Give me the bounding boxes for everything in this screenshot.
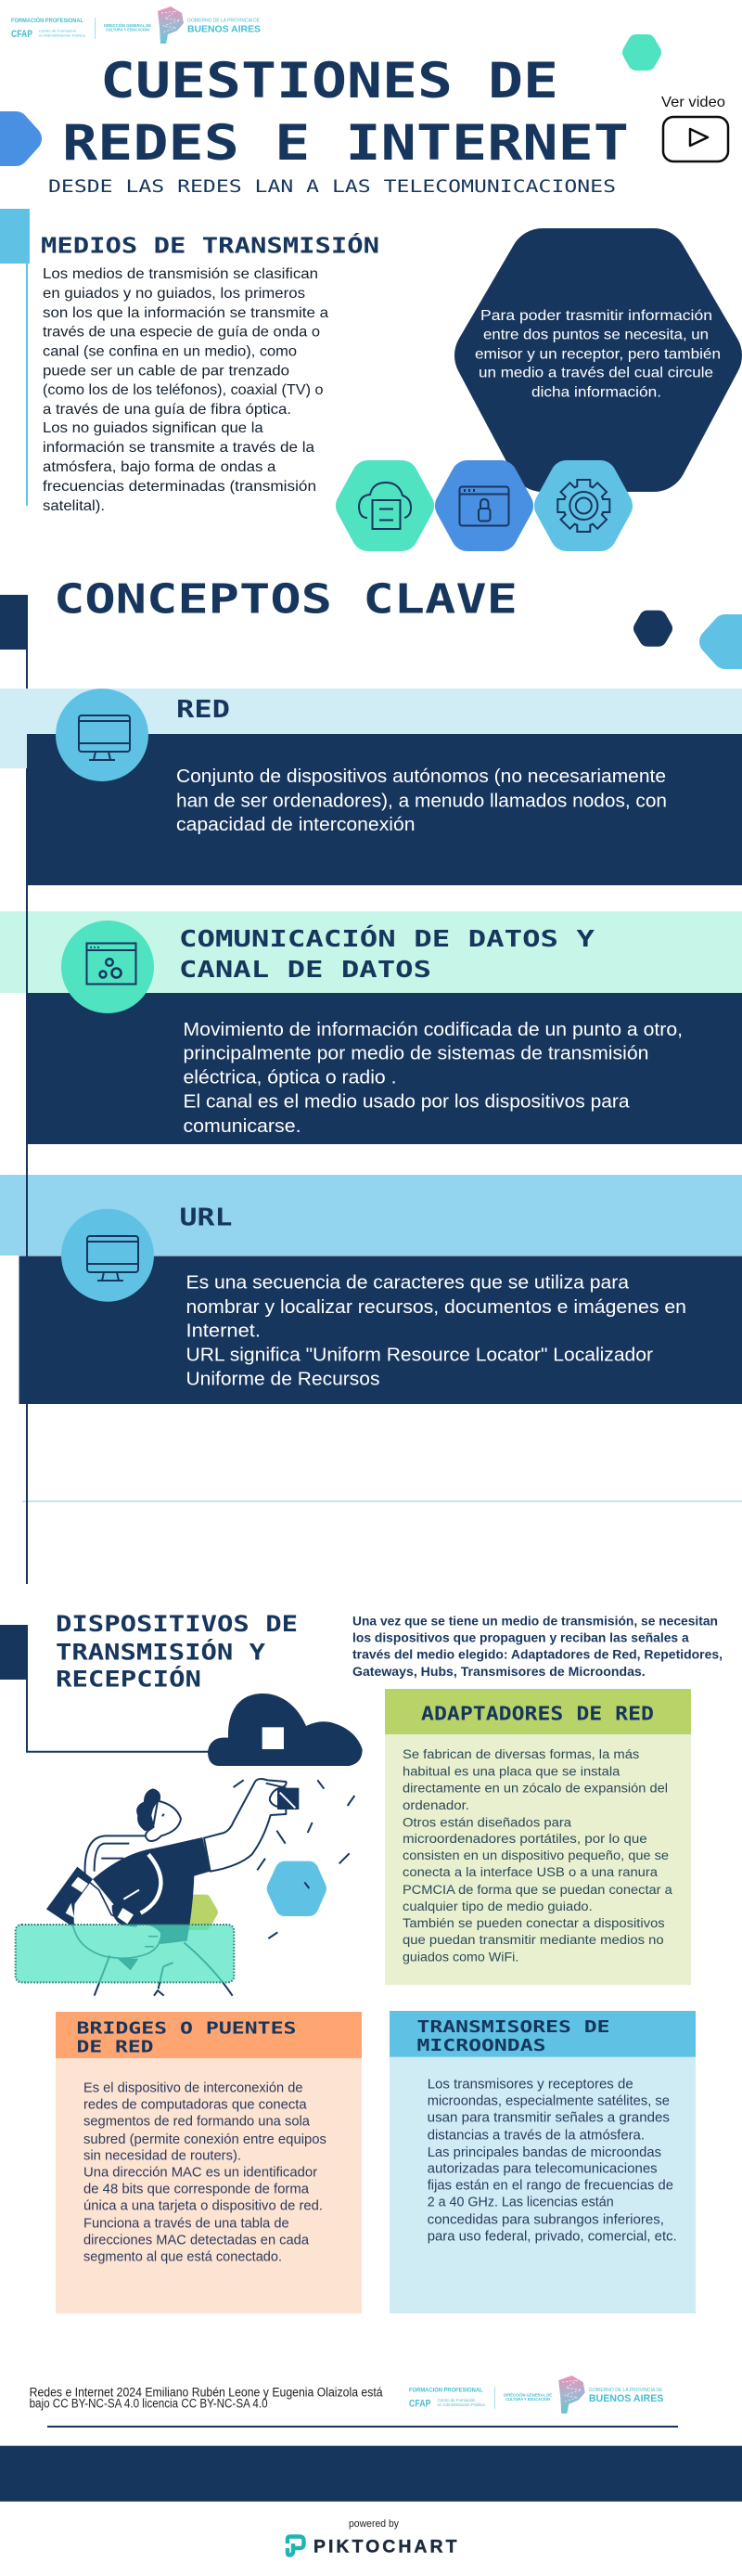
text block: bridges: única a una tarjeta o dispositivo de red. [83,2198,323,2214]
heading: transmisores: TRANSMISORES DE [417,2017,610,2037]
text block: intro dispositivos: Gateways, Hubs, Transmisores de Microondas. [352,1665,646,1679]
text block: adaptadores: directamente en un zócalo de expansión del [403,1781,668,1795]
heading: adaptadores: ADAPTADORES DE RED [421,1702,654,1724]
text block: medios: frecuencias determinadas (transmisión [43,479,316,495]
text block: adaptadores: microordenadores portátiles, por lo que [403,1832,647,1846]
text block: transmisores: Las principales bandas de microondas [428,2145,661,2160]
icon: cloud server hexagon [352,477,417,535]
text block: adaptadores: que puedan transmitir mediante medios no [403,1933,664,1947]
footer logos: DIRECCIÓN GENERAL DE [504,2392,552,2397]
block and rule: dispositivos [0,1625,215,1752]
text block: comunicacion [184,1020,683,1137]
footer license text [30,2386,383,2411]
footer logos: CULTURA Y EDUCACIÓN [505,2397,550,2402]
callout: navy hexagon: un medio a través del cual circule [479,366,713,381]
powered by piktochart: PIKTOCHART [313,2537,457,2557]
heading: medios: MEDIOS DE TRANSMISIÓN [41,233,379,259]
heading: dispositivos [56,1611,298,1693]
heading: dispositivos: TRANSMISIÓN Y [56,1637,266,1665]
panel: medios de transmision [0,209,379,514]
text block: transmisores: para uso federal, privado, comercial, etc. [428,2229,677,2245]
text block: bridges: Es el dispositivo de interconexión de [83,2080,302,2096]
text block: comunicacion: principalmente por medio de sistemas de transmisión [184,1044,649,1064]
hexagon: navy small [642,619,664,638]
heading: red: RED [176,696,230,724]
text block: transmisores: autorizadas para telecomunicaciones [428,2161,658,2177]
text block: transmisores: microondas, especialmente satélites, se [428,2093,670,2109]
title [62,53,629,172]
footer logos: CFAP [409,2399,431,2410]
text block: url: URL significa "Uniform Resource Locator" Localizador [186,1346,653,1366]
heading: transmisores: MICROONDAS [417,2036,545,2055]
panel: url [0,1175,742,1404]
panel: bridges [56,2012,362,2313]
text block: red: capacidad de interconexión [176,815,416,835]
text block: transmisores: distancias a través de la atmósfera. [428,2128,645,2144]
text block: medios: a través de una guía de fibra óptica. [43,402,291,418]
text block: medios: son los que la información se transmite a [43,305,328,321]
text block: bridges: direcciones MAC detectadas en cada [83,2233,310,2248]
text block: transmisores: 2 a 40 GHz. Las licencias están [428,2195,614,2210]
footer logos: BUENOS AIRES [589,2393,663,2404]
text block: adaptadores: Otros están diseñados para [403,1815,572,1829]
text block: medios: satelital). [43,498,105,514]
text block: bridges: Funciona a través de una tabla de [83,2216,289,2232]
text block: transmisores: usan para transmitir señales a grandes [428,2110,670,2126]
text block: medios: canal (se confina en un medio), como [43,343,297,359]
text block: adaptadores: consisten en un dispositivo pequeño, que se [403,1848,669,1862]
text block: url: nombrar y localizar recursos, documentos e imágenes en [186,1297,686,1318]
text block: medios: atmósfera, bajo forma de ondas a [43,459,276,475]
text block: medios: Los medios de transmisión se clasifican [43,266,318,282]
subtitle: DESDE LAS REDES LAN A LAS TELECOMUNICACIONES [48,176,616,197]
callout: navy hexagon: entre dos puntos se necesita, un [483,328,709,343]
text block: medios: puede ser un cable de par trenzado [43,363,289,379]
header logos: BUENOS AIRES [187,24,261,35]
text block: intro dispositivos [352,1615,723,1679]
text block: medios: (como los de los teléfonos), coaxial (TV) o [43,382,324,398]
text block: url: Es una secuencia de caracteres que se utiliza para [186,1272,630,1293]
header logos [11,6,261,44]
text block: medios [43,266,328,514]
icon: browser padlock hexagon [452,477,517,535]
icon: cloud [208,1694,363,1766]
text block: comunicacion: Movimiento de información codificada de un punto a otro, [184,1020,683,1040]
title: CUESTIONES DE [100,53,558,109]
panel: transmisores [390,2011,696,2313]
heading: dispositivos: DISPOSITIVOS DE [56,1611,298,1637]
text block: bridges: redes de computadoras que conecta [83,2097,307,2113]
text block: url: Internet. [186,1321,261,1342]
hexagon: sky right [712,627,742,656]
powered by piktochart [288,2518,457,2557]
title: REDES E INTERNET [62,115,629,172]
heading: bridges: DE RED [76,2038,154,2057]
text block: transmisores: concedidas para subrangos inferiores, [428,2212,664,2228]
callout: navy hexagon [475,262,721,458]
footer license text: bajo CC BY-NC-SA 4.0 licencia CC BY-NC-SA 4.0 [30,2397,268,2411]
icon: browser gears [61,921,154,1013]
video link: Ver video [661,95,725,110]
heading: url: URL [180,1204,232,1232]
hexagon: green [189,1900,213,1926]
heading: conceptos clave: CONCEPTOS CLAVE [54,576,518,624]
text block: comunicacion: eléctrica, óptica o radio . [184,1068,397,1088]
hexagon: blue left [0,124,29,153]
text block: url: Uniforme de Recursos [186,1370,380,1390]
header logos: CULTURA Y EDUCACIÓN [106,28,149,32]
header logos: FORMACIÓN PROFESIONAL [11,17,83,24]
text block: bridges: segmentos de red formando una sola [83,2114,311,2130]
text block: medios: en guiados y no guiados, los primeros [43,286,305,302]
dotted mint box [16,1925,234,1982]
text block: adaptadores: guiados como WiFi. [403,1950,518,1964]
footer logos [409,2376,663,2414]
text block: url [186,1272,686,1390]
text block: adaptadores: PCMCIA de forma que se puedan conectar a [403,1883,672,1897]
dashes [234,1780,354,1938]
text block: medios: información se transmite a través de la [43,440,314,456]
illustration: person and cloud [16,1694,363,1996]
text block: comunicacion: El canal es el medio usado por los dispositivos para [184,1092,630,1113]
footer license text: Redes e Internet 2024 Emiliano Rubén Leone y Eugenia Olaizola está [30,2386,383,2400]
text block: adaptadores [403,1747,672,1964]
text block: transmisores: fijas están en el rango de frecuencias de [428,2178,673,2194]
heading: comunicacion: COMUNICACIÓN DE DATOS Y [179,924,595,952]
text block: comunicacion: comunicarse. [184,1116,301,1137]
callout: navy hexagon: emisor y un receptor, pero también [475,347,721,363]
text block: transmisores: Los transmisores y receptores de [428,2077,633,2093]
text block: red: han de ser ordenadores), a menudo llamados nodos, con [176,791,667,811]
header logos: Centro de Formación [39,28,76,33]
powered by piktochart: powered by [349,2518,399,2530]
header logos: CFAP [11,29,32,40]
heading: bridges [76,2019,297,2057]
header logos: GOBIERNO DE LA PROVINCIA DE [187,19,261,24]
vertical rule and block: conceptos [0,595,28,1584]
icon: monitor url [61,1209,154,1302]
heading: transmisores [417,2017,610,2055]
text block: red [176,766,667,835]
header logos: en Administración Pública [39,33,86,37]
footer logos: FORMACIÓN PROFESIONAL [409,2386,483,2393]
panel: comunicacion de datos [0,911,742,1144]
text block: red: Conjunto de dispositivos autónomos (no necesariamente [176,766,666,787]
text block: bridges: subred (permite conexión entre equipos [83,2132,326,2147]
icon: gear hexagon [551,477,616,535]
text block: intro dispositivos: los dispositivos que propaguen y reciban las señales a [352,1630,689,1644]
hexagon: mint top right [631,43,653,62]
text block: adaptadores: ordenador. [403,1798,469,1812]
heading: bridges: BRIDGES O PUENTES [76,2019,297,2039]
heading: comunicacion: CANAL DE DATOS [179,956,431,983]
heading: comunicacion [179,924,595,983]
text block: adaptadores: cualquier tipo de medio guiado. [403,1900,593,1913]
footer logos: en Administración Pública [438,2402,485,2407]
video link [661,95,728,161]
text block: adaptadores: También se pueden conectar a dispositivos [403,1916,665,1930]
text block: adaptadores: conecta a la interface USB o a una ranura [403,1865,659,1879]
text block: transmisores [428,2077,677,2245]
icon: monitor [56,689,148,781]
text block: medios: través de una especie de guía de onda o [43,325,320,341]
footer logos: Centro de Formación [438,2398,475,2402]
hexagon: sky [276,1871,317,1907]
text block: intro dispositivos: través del medio elegido: Adaptadores de Red, Repetidores, [352,1648,723,1662]
callout: navy hexagon: Para poder trasmitir información [480,308,712,324]
text block: bridges: segmento al que está conectado. [83,2249,282,2265]
header logos: DIRECCIÓN GENERAL DE [104,23,151,28]
text block: intro dispositivos: Una vez que se tiene un medio de transmisión, se necesitan [352,1615,718,1629]
footer logos: GOBIERNO DE LA PROVINCIA DE [589,2388,663,2393]
text block: adaptadores: Se fabrican de diversas formas, la más [403,1747,640,1761]
panel: adaptadores de red [385,1689,691,1985]
text block: bridges: de 48 bits que corresponde de forma [83,2182,310,2197]
text block: bridges: sin necesidad de routers). [83,2148,241,2164]
text block: adaptadores: habitual es una placa que se instala [403,1764,620,1778]
footer band [0,2446,742,2502]
heading: dispositivos: RECEPCIÓN [56,1665,201,1693]
text block: bridges: Una dirección MAC es un identificador [83,2165,317,2181]
panel: red [0,689,742,885]
callout: navy hexagon: dicha información. [531,385,661,401]
person [46,1779,299,1996]
text block: medios: Los no guiados significan que la [43,420,263,436]
text block: bridges [83,2080,326,2265]
